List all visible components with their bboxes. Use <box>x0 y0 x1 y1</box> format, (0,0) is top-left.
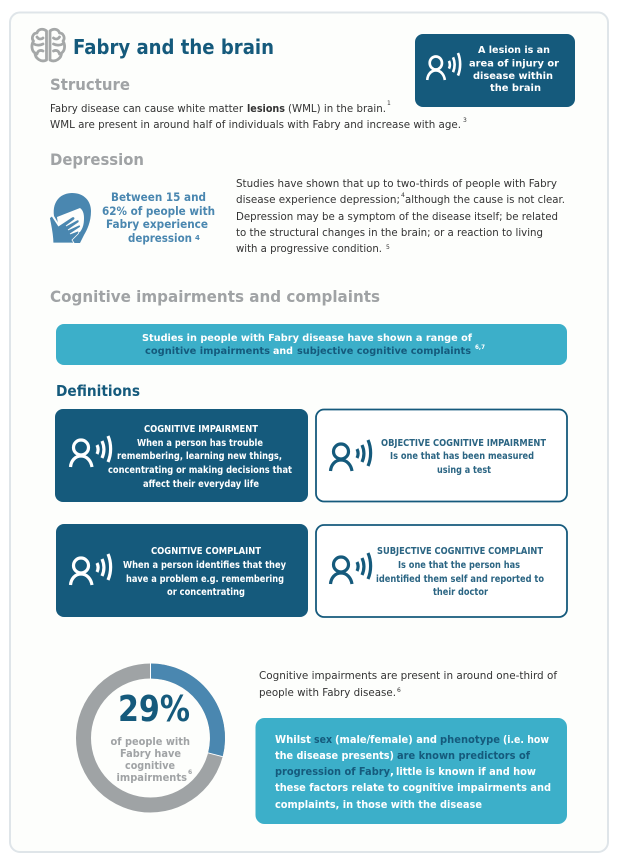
text block: depression: Studies have shown that up to two-thirds of people with Fabry <box>236 178 557 190</box>
heading: structure: Structure <box>50 75 130 94</box>
callout text: the brain <box>490 83 541 94</box>
donut caption: of people with <box>110 736 190 748</box>
card text: COGNITIVE COMPLAINT <box>151 546 261 557</box>
callout: predictors: Whilst <box>275 734 311 746</box>
card text: When a person has trouble <box>137 438 263 449</box>
banner: studies: Studies in people with Fabry disease have shown a range of <box>142 333 473 344</box>
donut value: 29% <box>118 689 190 730</box>
stat: depression prevalence: depression <box>128 231 192 245</box>
card text <box>108 424 292 490</box>
callout: predictors: (male/female) and <box>335 734 437 746</box>
text block: depression: disease experience depression; <box>236 194 400 206</box>
text block: structure: Fabry disease can cause white matter <box>50 103 244 115</box>
callout: predictors: , <box>390 766 394 778</box>
icon: brain <box>32 29 65 61</box>
text block: one-third: 6 <box>397 687 401 694</box>
card text: OBJECTIVE COGNITIVE IMPAIRMENT <box>381 438 546 449</box>
stat: depression prevalence: Fabry experience <box>106 217 208 231</box>
text block: structure <box>50 100 467 131</box>
text block: depression <box>236 178 565 255</box>
icon: person speaking <box>427 53 460 80</box>
card text: affect their everyday life <box>143 479 259 490</box>
text block: one-third: Cognitive impairments are present in around one-third of <box>259 670 557 682</box>
banner: studies: cognitive impairments <box>145 346 270 357</box>
card text: or concentrating <box>167 587 245 598</box>
card text <box>376 546 544 598</box>
card: subjective cognitive complaint <box>316 525 567 617</box>
card text: When a person identifies that they <box>123 560 287 571</box>
banner: studies: 6,7 <box>475 344 485 351</box>
card text: identified them self and reported to <box>376 574 544 585</box>
callout text: A lesion is an <box>478 45 550 56</box>
card text: their doctor <box>433 587 488 598</box>
donut caption: cognitive <box>125 760 175 772</box>
callout text <box>469 45 559 94</box>
text block: structure: lesions <box>247 103 285 115</box>
text block: one-third: people with Fabry disease. <box>259 687 396 699</box>
icon: person speaking <box>330 440 371 471</box>
card: cognitive complaint <box>56 524 308 617</box>
card text: using a test <box>437 465 491 476</box>
text block: depression: with a progressive condition. <box>236 243 382 255</box>
card text <box>123 546 287 598</box>
text block: structure: 1 <box>387 100 391 107</box>
text block: structure: (WML) in the brain. <box>288 103 386 115</box>
card text: remembering, learning new things, <box>117 451 282 462</box>
text block: depression: to the structural changes in the brain; or a reaction to living <box>236 227 543 239</box>
heading: depression: Depression <box>50 150 144 169</box>
stat: depression prevalence <box>102 190 215 245</box>
card text: Is one that the person has <box>398 560 520 571</box>
card text: concentrating or making decisions that <box>108 465 292 476</box>
card text: have a problem e.g. remembering <box>126 574 284 585</box>
callout text: disease within <box>473 71 553 82</box>
text block: depression: 4 <box>401 192 405 199</box>
callout: predictors: the disease presents) <box>275 750 394 762</box>
text block: structure: WML are present in around half of individuals with Fabry and increase with age. <box>50 119 461 131</box>
title: Fabry and the brain <box>73 35 274 59</box>
text block: depression: 5 <box>386 244 390 251</box>
card text: Is one that has been measured <box>390 451 534 462</box>
heading: cognitive impairments: Cognitive impairments and complaints <box>50 287 380 306</box>
callout: predictors: little is known if and how <box>396 766 536 778</box>
icon: person speaking <box>330 553 371 584</box>
icon: person speaking <box>70 436 111 467</box>
callout: lesion definition <box>415 34 575 107</box>
stat: depression prevalence: Between 15 and <box>111 190 206 204</box>
callout: predictors: complaints, in those with the disease <box>275 799 482 811</box>
heading: definitions: Definitions <box>56 382 140 400</box>
banner: studies: and <box>273 346 293 357</box>
text block: one-third <box>259 670 557 699</box>
donut caption: impairments <box>116 772 187 784</box>
callout: predictors: these factors relate to cognitive impairments and <box>275 782 551 794</box>
stat: depression prevalence: 4 <box>195 234 200 242</box>
callout: predictors: are known predictors of <box>397 750 530 762</box>
donut caption <box>110 736 192 784</box>
text block: depression: Depression may be a symptom of the disease itself; be related <box>236 211 558 223</box>
callout: predictors: phenotype <box>440 734 500 746</box>
donut caption: 6 <box>188 769 192 776</box>
card text: COGNITIVE IMPAIRMENT <box>144 424 258 435</box>
donut chart: 29% <box>84 664 223 805</box>
card text <box>381 438 546 476</box>
card: objective cognitive impairment <box>316 410 567 502</box>
callout: predictors: sex <box>314 734 332 746</box>
icon: face with hand <box>50 193 91 243</box>
text block: depression: although the cause is not clear. <box>405 194 565 206</box>
banner: studies: subjective cognitive complaints <box>297 346 471 357</box>
callout: predictors <box>256 718 567 824</box>
donut caption: Fabry have <box>120 748 181 760</box>
callout: predictors: progression of Fabry <box>275 766 390 778</box>
text block: structure: 3 <box>463 117 467 124</box>
card text: SUBJECTIVE COGNITIVE COMPLAINT <box>377 546 543 557</box>
callout: predictors: (i.e. how <box>503 734 549 746</box>
icon: person speaking <box>70 554 111 585</box>
card: cognitive impairment <box>55 409 308 502</box>
stat: depression prevalence: 62% of people with <box>102 204 215 218</box>
callout text: area of injury or <box>469 58 559 70</box>
banner: studies <box>56 324 567 365</box>
